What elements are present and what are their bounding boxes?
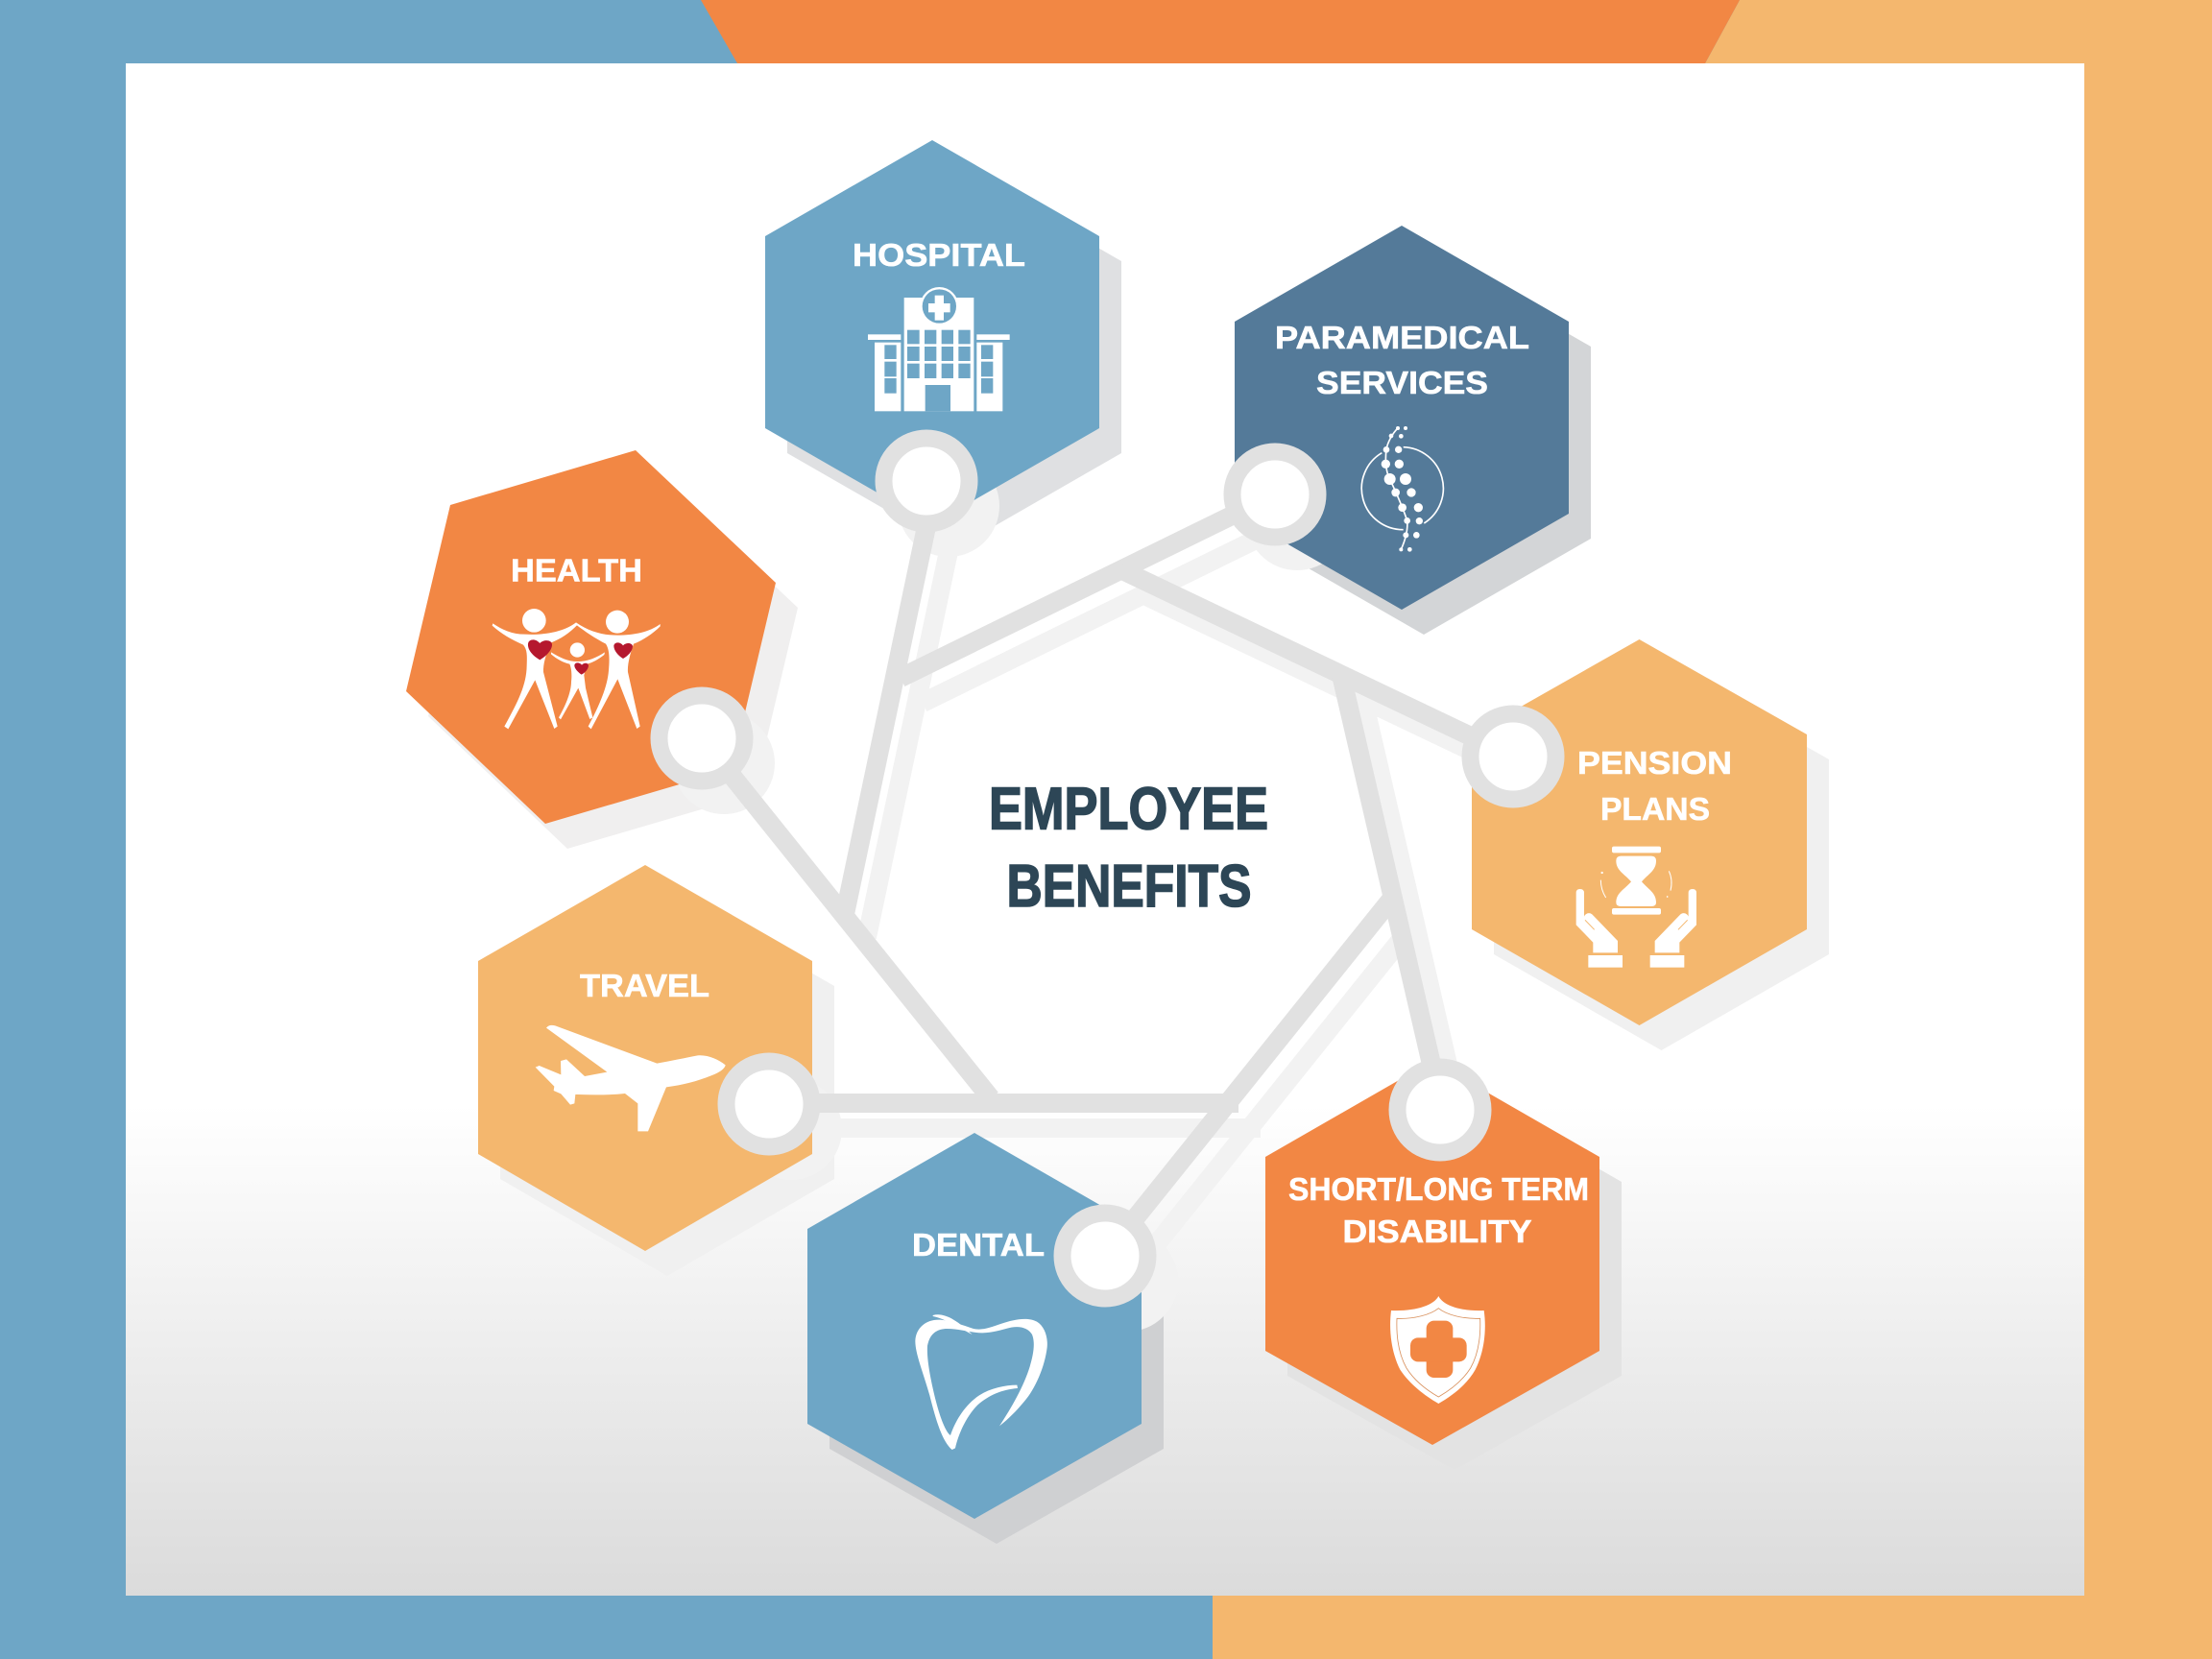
- node: hospital: [883, 438, 970, 524]
- label: short/long term disability: DISABILITY: [1342, 1214, 1532, 1249]
- label: dental: DENTAL: [912, 1227, 1045, 1262]
- label: paramedical services: PARAMEDICAL: [1275, 320, 1529, 355]
- label: travel: TRAVEL: [580, 968, 709, 1003]
- title: EMPLOYEE: [989, 776, 1268, 843]
- icon: airplane: [536, 1025, 726, 1131]
- panel: short/long term disability: [1265, 1061, 1599, 1445]
- panel: dental: [807, 1133, 1142, 1519]
- panel: health: [406, 450, 776, 824]
- label: paramedical services: [1275, 320, 1529, 400]
- node: pension: [1471, 714, 1555, 799]
- icon: medical shield: [1390, 1296, 1485, 1404]
- panel: paramedical services: [1235, 226, 1569, 610]
- node: disability: [1398, 1068, 1482, 1152]
- label: short/long term disability: SHORT/LONG TERM: [1288, 1171, 1589, 1207]
- title: [989, 776, 1268, 920]
- hexagon drop shadows: [428, 165, 1829, 1544]
- label: short/long term disability: [1288, 1171, 1589, 1249]
- title: BENEFITS: [1006, 854, 1252, 920]
- label: pension plans: PLANS: [1600, 791, 1710, 827]
- label: pension plans: PENSION: [1577, 745, 1732, 781]
- connector shadows: [673, 455, 1535, 1332]
- icon: tooth: [915, 1314, 1047, 1450]
- panel: travel: [478, 865, 812, 1251]
- node: dental: [1062, 1214, 1148, 1298]
- node: paramedical: [1233, 451, 1317, 538]
- node: travel: [726, 1062, 812, 1146]
- icon: spine: [1361, 426, 1443, 552]
- label: health: HEALTH: [511, 553, 642, 588]
- node: health: [659, 695, 745, 781]
- icon: hospital building: [868, 287, 1010, 411]
- label: paramedical services: SERVICES: [1316, 365, 1488, 400]
- icon: hourglass held by hands: [1576, 847, 1696, 968]
- label: pension plans: [1577, 745, 1732, 827]
- connector network: [702, 481, 1513, 1256]
- label: hospital: HOSPITAL: [853, 237, 1025, 273]
- panel: pension plans: [1472, 639, 1807, 1025]
- panel: hospital: [765, 140, 1099, 524]
- icon: family with hearts: [493, 609, 661, 729]
